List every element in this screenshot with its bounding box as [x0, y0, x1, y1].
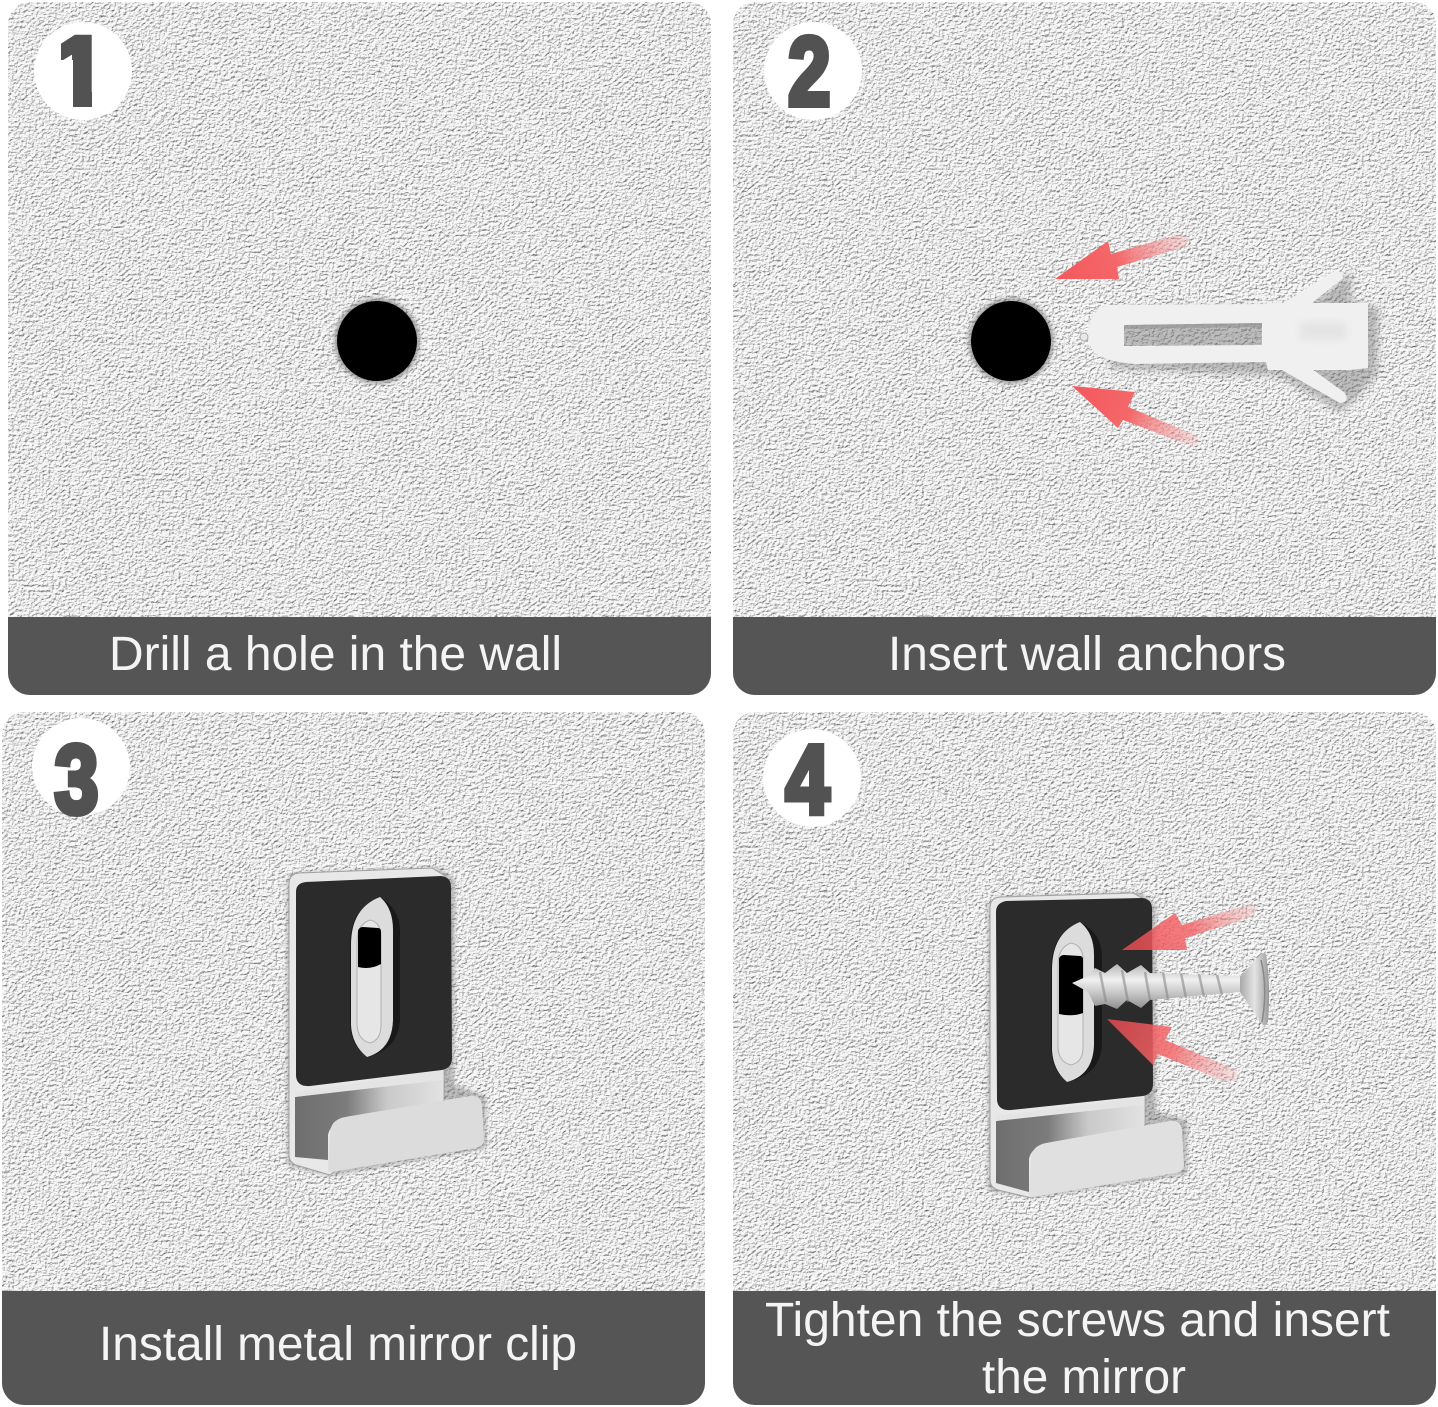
panel: step 2 insert wall anchors — [733, 2, 1436, 695]
icon: clip with screw in place — [988, 892, 1187, 1198]
caption bar: install metal mirror clip: Install metal mirror clip — [99, 1318, 577, 1371]
caption bar: insert wall anchors — [733, 617, 1436, 695]
step number 4 — [763, 725, 861, 834]
step number 3: 3 — [54, 725, 98, 834]
wall texture — [8, 2, 711, 695]
step number 3 — [32, 718, 130, 834]
icon: drilled hole — [968, 298, 1054, 384]
wall texture — [733, 2, 1436, 695]
caption bar: tighten the screws and insert the mirror: the mirror — [982, 1351, 1186, 1404]
panel: step 1 drill a hole — [8, 2, 711, 695]
step number 1 — [34, 22, 132, 120]
caption bar: drill a hole in the wall: Drill a hole in the wall — [109, 628, 562, 681]
caption bar: insert wall anchors: Insert wall anchors — [888, 628, 1286, 681]
icon: plastic wall anchor — [1080, 271, 1379, 412]
arrow: lower red arrow — [1107, 1019, 1238, 1082]
icon: drilled hole — [334, 298, 420, 384]
icon: screw — [1072, 953, 1269, 1026]
step number 2 — [764, 17, 862, 126]
icon: metal mirror clip — [287, 868, 486, 1176]
caption bar: tighten the screws and insert the mirror: Tighten the screws and insert — [765, 1294, 1390, 1347]
caption bar: install metal mirror clip — [2, 1291, 705, 1405]
step number 1: 1 — [52, 17, 107, 126]
wall texture — [2, 712, 705, 1405]
arrow: lower red arrow — [1072, 386, 1198, 446]
caption bar: drill a hole in the wall — [8, 617, 711, 695]
arrow: upper red arrow — [1122, 904, 1258, 950]
panel: step 4 tighten screws — [733, 712, 1436, 1405]
step number 4: 4 — [786, 725, 830, 834]
step number 2: 2 — [788, 17, 830, 126]
panel: step 3 install metal mirror clip — [2, 712, 705, 1405]
arrow: upper red arrow — [1055, 234, 1190, 279]
caption bar: tighten the screws and insert the mirror — [733, 1291, 1436, 1405]
wall texture — [733, 712, 1436, 1405]
